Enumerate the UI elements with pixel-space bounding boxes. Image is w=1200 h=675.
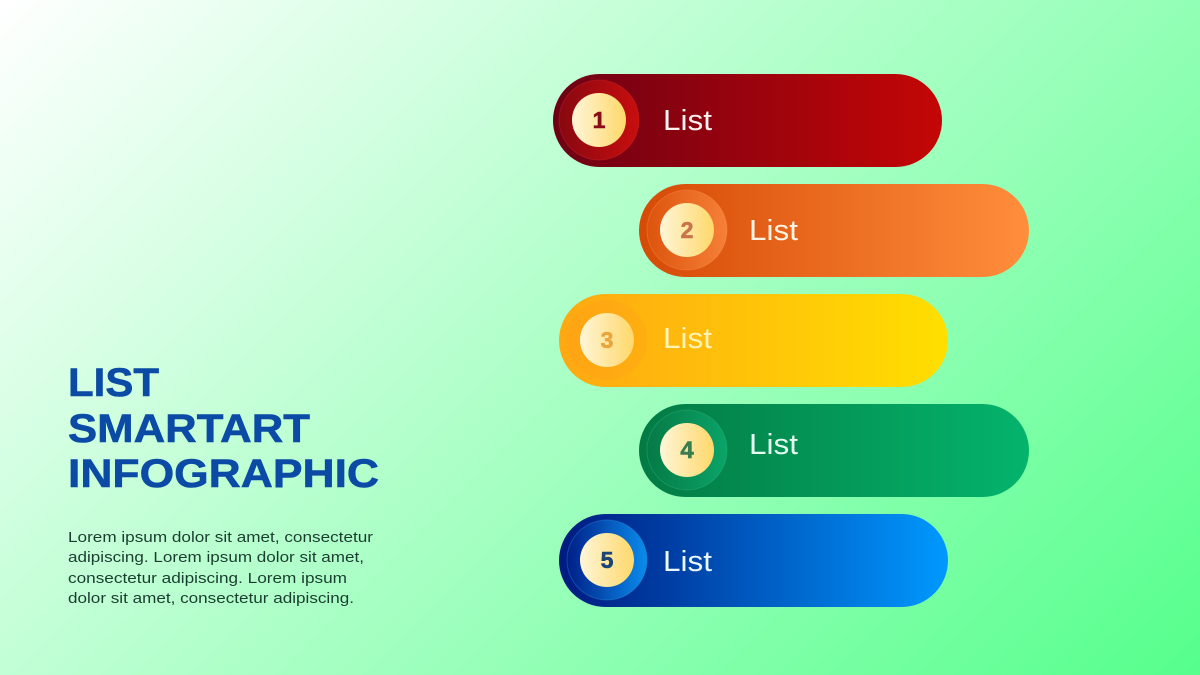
list item 5: List: [663, 546, 712, 578]
list item 1: 1: [593, 107, 606, 133]
body text: dolor sit amet, consectetur adipiscing.: [68, 590, 354, 607]
body text: adipiscing. Lorem ipsum dolor sit amet,: [68, 549, 364, 566]
list item 2: List: [749, 215, 798, 247]
title: [68, 361, 379, 496]
list item 3: [559, 294, 948, 387]
list item 3: 3: [601, 327, 613, 353]
list item 2: 2: [681, 217, 693, 243]
body text: Lorem ipsum dolor sit amet, consectetur: [68, 529, 373, 546]
list item 1: List: [663, 105, 712, 137]
title: INFOGRAPHIC: [68, 452, 379, 496]
list item 4: List: [749, 429, 798, 461]
list item 4: 4: [680, 437, 694, 464]
body text: consectetur adipiscing. Lorem ipsum: [68, 570, 347, 587]
title: LIST: [68, 361, 159, 405]
list item 1: [553, 74, 942, 167]
list item 3: List: [663, 323, 712, 355]
body text: [68, 529, 373, 607]
list item 5: 5: [601, 547, 614, 573]
list item 2: [639, 184, 1029, 277]
title: SMARTART: [68, 407, 310, 451]
list item 4: [639, 404, 1029, 497]
list item 5: [559, 514, 948, 607]
